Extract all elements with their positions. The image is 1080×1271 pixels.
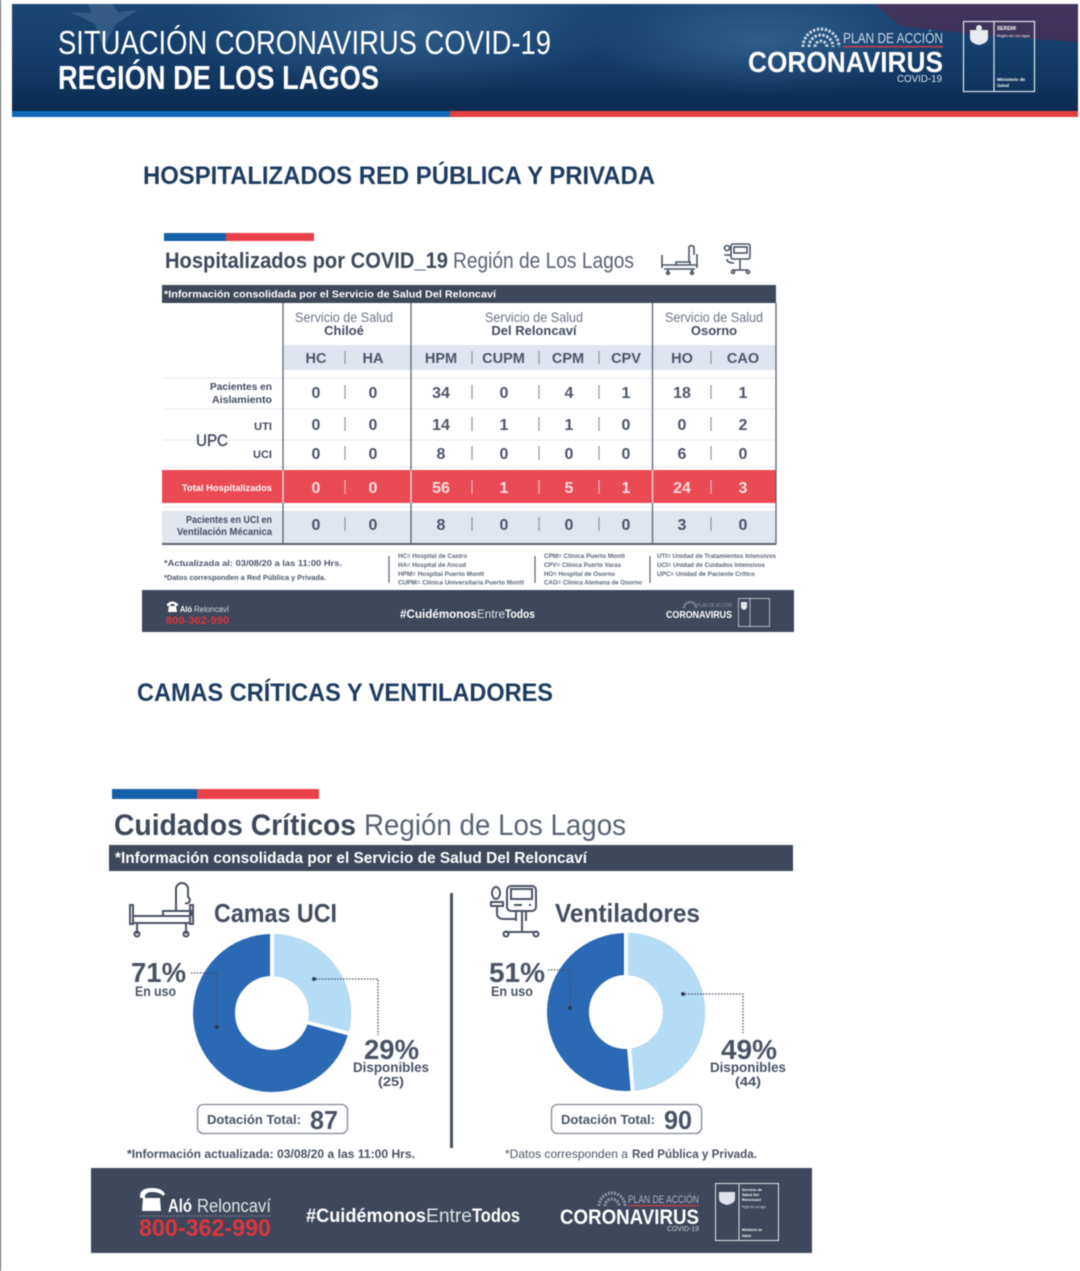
table values: ventilación mecánica: 0	[622, 517, 631, 534]
abbreviations legend: HO= Hospital de Osorno	[544, 572, 615, 578]
logo: seremi ministerio de salud	[964, 21, 1034, 92]
ventilation row background	[162, 511, 776, 543]
accent bar	[164, 233, 314, 241]
footnotes: *Datos corresponden a Red Pública y Privada.	[164, 573, 326, 582]
header title: SITUACIÓN CORONAVIRUS COVID-19	[58, 24, 551, 61]
footer band: #Cuidémonos	[400, 607, 477, 621]
table values: UTI: 0	[369, 417, 378, 434]
row labels	[177, 382, 272, 538]
logo: servicio de salud del reloncaví: Salud	[742, 1233, 751, 1238]
logo: seremi ministerio de salud: Región de Los Lagos	[997, 33, 1030, 38]
table values: UCI: 0	[739, 446, 748, 463]
logo: servicio de salud del reloncaví: Servicio de	[742, 1187, 763, 1192]
footer band: Entre	[477, 607, 505, 621]
table values: total	[312, 480, 748, 497]
callout: 29% disponibles	[312, 977, 429, 1089]
hashtag: Todos	[472, 1206, 520, 1227]
callout: 51% en uso: En uso	[491, 984, 533, 999]
abbreviations legend: CPM= Clínica Puerto Montt	[544, 554, 625, 560]
abbreviations legend	[389, 554, 777, 586]
abbreviations legend: CPV= Clínica Puerto Varas	[544, 563, 622, 569]
header title	[58, 24, 551, 96]
icon: hospital bed	[662, 246, 697, 274]
icon: telephone	[140, 1188, 165, 1211]
service headings: Chiloé	[324, 323, 364, 338]
column codes: HA	[363, 351, 384, 367]
total box: dotación 87: Dotación Total:	[207, 1113, 301, 1127]
table values: UCI: 0	[565, 446, 574, 463]
service headings	[295, 309, 763, 338]
footnote: fecha: *Información actualizada: 03/08/20 a las 11:00 Hrs.	[127, 1147, 415, 1161]
heading: camas UCI: Camas UCI	[214, 898, 337, 928]
callout: 49% disponibles	[681, 992, 786, 1089]
table values: UCI: 6	[678, 446, 687, 463]
logo: plan de acción coronavirus	[560, 1193, 699, 1233]
logo: servicio de salud del reloncaví: Reloncaví	[742, 1197, 762, 1202]
service headings: Osorno	[691, 323, 737, 338]
total box: dotación 90	[552, 1104, 702, 1135]
table values: UTI: 0	[312, 417, 321, 434]
column codes: CAO	[727, 351, 759, 367]
column codes: CPV	[611, 351, 641, 367]
logo: seremi ministerio de salud: Salud	[997, 83, 1009, 88]
table values: aislamiento: 1	[622, 385, 631, 402]
table values: aislamiento: 34	[432, 385, 450, 402]
callout: 29% disponibles: Disponibles	[353, 1060, 429, 1075]
table values: total: 0	[369, 480, 378, 497]
callout: 29% disponibles: (25)	[378, 1074, 404, 1089]
column codes: CUPM	[482, 351, 525, 367]
abbreviations legend: HC= Hospital de Castro	[398, 554, 467, 560]
table values: UCI: 8	[437, 446, 446, 463]
panel title	[165, 248, 634, 273]
logo: servicio de salud del reloncaví: Ministerio de	[742, 1227, 763, 1232]
callout: 49% disponibles: Disponibles	[710, 1060, 786, 1075]
table values: ventilación mecánica	[312, 517, 748, 534]
info bar: *Información consolidada por el Servicio de Salud Del Reloncaví	[164, 288, 497, 300]
callout: 29% disponibles: 29%	[364, 1034, 419, 1065]
footnotes: *Actualizada al: 03/08/20 a las 11:00 Hrs.	[164, 558, 342, 568]
callout: 71% en uso	[131, 957, 219, 1029]
icon: ventilator	[491, 886, 538, 936]
table values: aislamiento	[312, 385, 748, 402]
total box: dotación 90: Dotación Total:	[561, 1113, 655, 1127]
column codes: CPM	[552, 351, 584, 367]
footer band: PLAN DE ACCIÓN	[697, 602, 732, 609]
panel title: Hospitalizados por COVID_19	[165, 248, 448, 273]
total box: dotación 87	[198, 1104, 348, 1135]
table values: aislamiento: 4	[565, 385, 574, 402]
header banner	[12, 0, 1078, 117]
logo: plan de acción coronavirus: CORONAVIRUS	[560, 1206, 699, 1229]
table values: UCI: 0	[312, 446, 321, 463]
row labels: UCI	[253, 449, 272, 461]
table values: total: 1	[622, 480, 631, 497]
table values: ventilación mecánica: 0	[312, 517, 321, 534]
row labels: UTI	[254, 421, 272, 433]
panel: hospitalizados table	[142, 233, 794, 632]
donut chart: camas UCI	[214, 930, 354, 1071]
hashtag: #Cuidémonos	[306, 1206, 426, 1227]
info bar: *Información consolidada por el Servicio de Salud Del Reloncaví	[115, 850, 588, 867]
hashtag: Entre	[426, 1206, 472, 1227]
logo: plan de acción coronavirus: COVID-19	[897, 74, 942, 85]
service headings: Servicio de Salud	[295, 309, 393, 325]
table values: UTI: 1	[565, 417, 574, 434]
callout: 51% en uso	[489, 957, 572, 1010]
callout: 71% en uso: En uso	[135, 984, 176, 999]
ventiladores column	[489, 886, 786, 1161]
abbreviations legend: UTI= Unidad de Tratamientos Intensivos	[657, 554, 777, 560]
table values: UTI: 14	[432, 417, 450, 434]
helpline: 800-362-990	[139, 1215, 271, 1242]
abbreviations legend: HA= Hospital de Ancud	[398, 563, 466, 569]
table values: ventilación mecánica: 0	[565, 517, 574, 534]
table values: UCI: 0	[500, 446, 509, 463]
footnote: fuente: Red Pública y Privada.	[632, 1147, 757, 1161]
table values: UTI	[312, 417, 748, 434]
logo: seremi ministerio de salud: Ministerio de	[997, 77, 1025, 82]
footnotes	[164, 558, 342, 582]
service headings: Servicio de Salud	[665, 309, 763, 325]
icon: ventilator	[724, 244, 750, 274]
table values: total: 3	[739, 480, 748, 497]
logo: plan de acción coronavirus: PLAN DE ACCIÓN	[843, 30, 943, 47]
accent bar	[112, 789, 319, 799]
table values: ventilación mecánica: 0	[739, 517, 748, 534]
footer band	[91, 1168, 812, 1253]
table values: total: 56	[432, 480, 450, 497]
table values: aislamiento: 0	[500, 385, 509, 402]
footnote: fuente	[505, 1147, 757, 1161]
helpline: Reloncaví	[197, 1196, 271, 1216]
row labels: Total Hospitalizados	[182, 483, 272, 494]
logo: plan de acción coronavirus: COVID-19	[667, 1226, 699, 1233]
footer band	[142, 590, 794, 632]
table values: UTI: 0	[678, 417, 687, 434]
logo: servicio de salud del reloncaví: Salud Del	[742, 1192, 759, 1197]
row labels: Pacientes en UCI en	[186, 515, 272, 526]
abbreviations legend: CUPM= Clínica Universitaria Puerto Montt	[398, 580, 524, 586]
abbreviations legend: CAO= Clínica Alemana de Osorno	[544, 580, 642, 586]
logo: plan de acción coronavirus: CORONAVIRUS	[748, 47, 943, 79]
helpline	[139, 1196, 271, 1242]
icon: hospital bed	[130, 883, 193, 936]
table values: aislamiento: 18	[673, 385, 691, 402]
callout: 49% disponibles: 49%	[721, 1034, 777, 1065]
row labels: Aislamiento	[212, 395, 272, 406]
table values: aislamiento: 0	[369, 385, 378, 402]
column codes: HPM	[425, 351, 457, 367]
table values: ventilación mecánica: 0	[500, 517, 509, 534]
row labels: Pacientes en	[210, 382, 272, 393]
table values: UTI: 2	[739, 417, 748, 434]
table values: UCI: 0	[622, 446, 631, 463]
abbreviations legend: UPC= Unidad de Paciente Crítico	[657, 572, 755, 578]
table values: ventilación mecánica: 0	[369, 517, 378, 534]
total box: dotación 87: 87	[310, 1105, 338, 1135]
footer band: 800-362-990	[166, 615, 229, 627]
table values: UTI: 1	[500, 417, 509, 434]
column codes: HO	[671, 351, 693, 367]
panel title: Región de Los Lagos	[453, 248, 634, 273]
camas UCI column	[127, 883, 429, 1161]
logo: servicio de salud del reloncaví	[716, 1183, 778, 1241]
table values: UCI: 0	[369, 446, 378, 463]
service headings: Servicio de Salud	[485, 309, 583, 325]
column codes	[306, 351, 759, 367]
footer band: Reloncaví	[194, 605, 230, 614]
table values: ventilación mecánica: 3	[678, 517, 687, 534]
panel title: Región de Los Lagos	[364, 809, 626, 842]
total row	[162, 470, 776, 503]
abbreviations legend: UCI= Unidad de Cuidados Intensivos	[657, 563, 766, 569]
footer band: Todos	[505, 607, 535, 621]
table values: aislamiento: 0	[312, 385, 321, 402]
table values: total: 24	[673, 480, 691, 497]
footer band: CORONAVIRUS	[666, 610, 732, 621]
table values: UCI	[312, 446, 748, 463]
total box: dotación 90: 90	[664, 1105, 692, 1135]
panel: cuidados críticos	[91, 789, 812, 1253]
row labels: UPC	[196, 432, 228, 450]
table values: ventilación mecánica: 8	[437, 517, 446, 534]
abbreviations legend: HPM= Hospital Puerto Montt	[398, 572, 484, 578]
divider	[450, 893, 453, 1148]
section heading: camas críticas: CAMAS CRÍTICAS Y VENTILADORES	[137, 678, 553, 707]
section heading: hospitalizados: HOSPITALIZADOS RED PÚBLICA Y PRIVADA	[143, 160, 655, 190]
callout: 51% en uso: 51%	[489, 957, 545, 988]
panel title: Cuidados Críticos	[114, 809, 356, 842]
table values: aislamiento: 1	[739, 385, 748, 402]
footer band: Aló	[180, 605, 192, 614]
heading: ventiladores: Ventiladores	[555, 898, 700, 928]
header row background	[284, 345, 776, 370]
footnote: fuente: *Datos corresponden a	[505, 1147, 628, 1161]
logo: seremi ministerio de salud: SEREMI	[997, 26, 1017, 32]
table values: UTI: 0	[622, 417, 631, 434]
panel title	[114, 809, 626, 842]
logo: plan de acción coronavirus: PLAN DE ACCIÓN	[628, 1193, 699, 1206]
info bar	[109, 845, 793, 871]
table values: total: 0	[312, 480, 321, 497]
helpline: Aló	[168, 1196, 192, 1216]
logo: plan de acción coronavirus	[748, 29, 943, 85]
donut chart: ventiladores	[568, 929, 684, 1095]
header title: REGIÓN DE LOS LAGOS	[58, 59, 379, 96]
callout: 49% disponibles: (44)	[735, 1074, 761, 1089]
service headings: Del Reloncaví	[491, 323, 577, 338]
table values: total: 1	[500, 480, 509, 497]
column codes: HC	[306, 351, 327, 367]
row labels: Ventilación Mécanica	[177, 527, 272, 538]
callout: 71% en uso: 71%	[131, 957, 186, 988]
logo: servicio de salud del reloncaví: Región de Los Lagos	[742, 1205, 766, 1209]
hashtag	[306, 1206, 520, 1227]
table values: total: 5	[565, 480, 574, 497]
info bar	[162, 285, 776, 303]
